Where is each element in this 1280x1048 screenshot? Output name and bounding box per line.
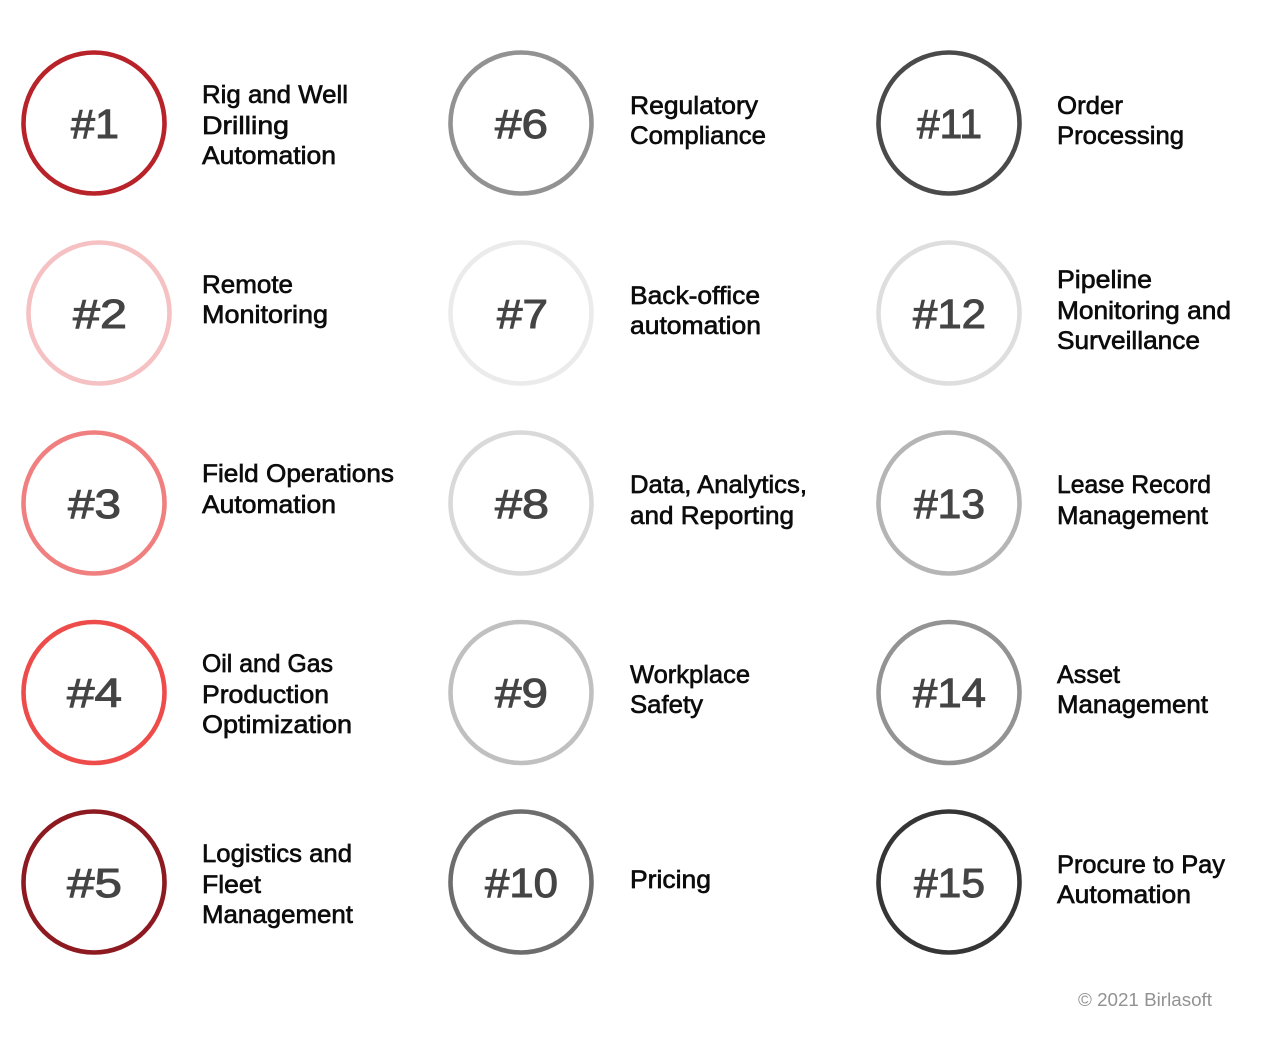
- item 1: Rig and Well: [202, 81, 348, 109]
- item 14: Asset: [1057, 661, 1120, 689]
- item 4: [24, 622, 352, 763]
- item 11: Order: [1057, 92, 1123, 120]
- item 2: [28, 242, 328, 384]
- item 14: [878, 622, 1208, 763]
- item 13: #13: [914, 481, 985, 527]
- item 10: Pricing: [630, 866, 711, 894]
- item 1: Drilling: [202, 112, 289, 140]
- item 15: Procure to Pay: [1057, 851, 1226, 879]
- item 4: Oil and Gas: [202, 650, 333, 678]
- item 6: [450, 52, 766, 194]
- copyright: © 2021 Birlasoft: [1078, 990, 1212, 1010]
- item 1: [24, 52, 348, 194]
- item 8: [450, 432, 807, 574]
- item 15: #15: [914, 860, 985, 906]
- item 12: [878, 242, 1231, 384]
- item 9: Safety: [630, 691, 704, 719]
- item 6: #6: [495, 101, 548, 147]
- item 5: Fleet: [202, 871, 261, 899]
- item 4: Production: [202, 681, 329, 709]
- item 8: #8: [495, 481, 549, 527]
- item 6: Regulatory: [630, 92, 759, 120]
- item 4: Optimization: [202, 711, 352, 739]
- item 6: Compliance: [630, 122, 766, 150]
- item 2: Monitoring: [202, 301, 328, 329]
- item 12: Monitoring and: [1057, 297, 1231, 325]
- item 9: Workplace: [630, 661, 750, 689]
- item 10: #10: [485, 860, 558, 906]
- item 12: #12: [913, 291, 986, 337]
- item 11: #11: [917, 101, 982, 147]
- item 5: Logistics and: [202, 840, 352, 868]
- item 4: #4: [67, 670, 122, 716]
- item 7: Back-office: [630, 282, 760, 310]
- item 1: #1: [71, 101, 119, 147]
- item 14: Management: [1057, 691, 1208, 719]
- item 5: #5: [67, 860, 122, 906]
- item 8: Data, Analytics,: [630, 471, 807, 499]
- item 7: #7: [497, 291, 548, 337]
- item 13: [878, 432, 1211, 574]
- item 9: #9: [495, 670, 548, 716]
- item 3: Automation: [202, 491, 336, 519]
- item 13: Management: [1057, 502, 1208, 530]
- item 11: Processing: [1057, 122, 1184, 150]
- item 10: [450, 812, 711, 952]
- item 5: Management: [202, 901, 353, 929]
- item 9: [450, 622, 750, 763]
- item 11: [878, 52, 1184, 194]
- item 2: #2: [73, 291, 127, 337]
- item 15: Automation: [1057, 881, 1191, 909]
- item 3: #3: [68, 481, 121, 527]
- item 3: Field Operations: [202, 460, 394, 488]
- item 12: Surveillance: [1057, 327, 1200, 355]
- item 7: [450, 242, 761, 384]
- item 8: and Reporting: [630, 502, 794, 530]
- item 13: Lease Record: [1057, 471, 1211, 499]
- item 14: #14: [913, 670, 986, 716]
- item 15: [878, 812, 1226, 952]
- item 1: Automation: [202, 142, 336, 170]
- item 7: automation: [630, 312, 761, 340]
- item 2: Remote: [202, 271, 293, 299]
- item 12: Pipeline: [1057, 266, 1152, 294]
- item 3: [24, 432, 394, 574]
- item 5: [24, 812, 353, 952]
